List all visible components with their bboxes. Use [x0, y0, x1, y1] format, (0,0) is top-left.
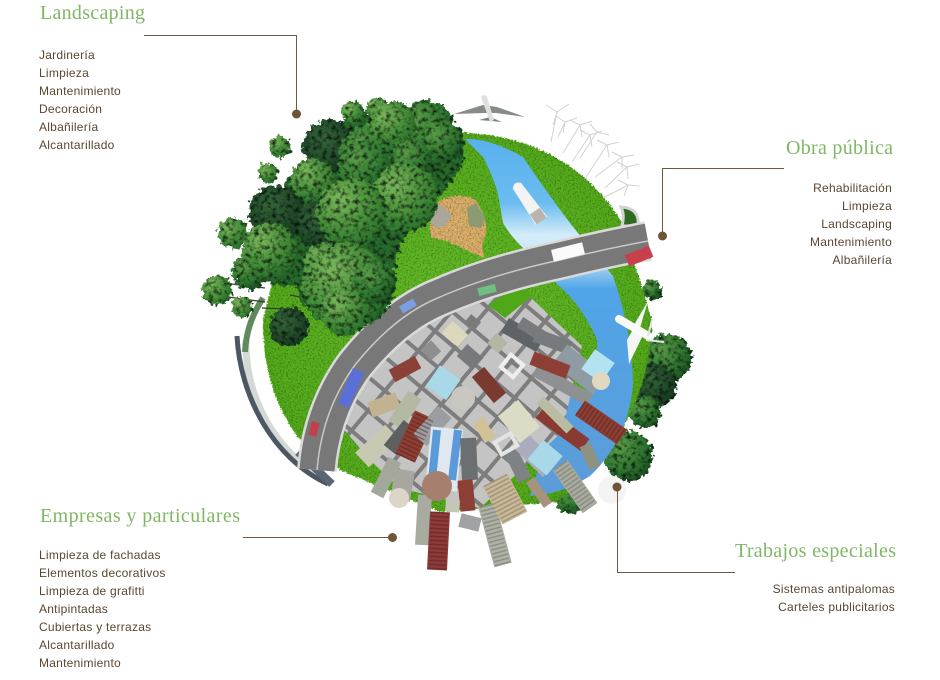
grass sphere	[263, 132, 652, 512]
list: Landscaping services: Decoración	[39, 102, 102, 116]
road curl	[621, 207, 638, 226]
list: Obra pública services	[810, 181, 892, 267]
list: Trabajos especiales services	[773, 582, 895, 614]
list: Landscaping services: Limpieza	[39, 66, 89, 80]
list: Empresas y particulares services: Limpieza de fachadas	[39, 548, 161, 562]
list: Empresas y particulares services: Limpieza de grafitti	[39, 584, 145, 598]
right side trees	[554, 280, 692, 514]
green wedge between road and city	[488, 282, 532, 318]
list: Landscaping services: Albañilería	[39, 120, 99, 134]
list: Obra pública services: Landscaping	[821, 217, 892, 231]
list: Landscaping services: Mantenimiento	[39, 84, 121, 98]
connector: Empresas y particulares	[243, 533, 397, 542]
houses	[427, 203, 485, 228]
list: Landscaping services: Alcantarillado	[39, 138, 115, 152]
list: Empresas y particulares services: Mantenimiento	[39, 656, 121, 670]
trees: bright canopy	[202, 97, 464, 336]
airplane: top	[454, 95, 525, 122]
list: Obra pública services: Rehabilitación	[813, 181, 892, 195]
illustration: miniature planet	[202, 95, 692, 570]
list: Empresas y particulares services	[39, 548, 166, 670]
list: Obra pública services: Limpieza	[842, 199, 892, 213]
list: Empresas y particulares services: Elementos decorativos	[39, 566, 166, 580]
wind turbines	[546, 104, 640, 198]
heading: Trabajos especiales: Trabajos especiales	[735, 540, 896, 562]
elevated rail ring	[237, 298, 332, 484]
airplane: right	[619, 301, 664, 364]
sand clearing	[430, 196, 486, 258]
list: Landscaping services	[39, 48, 121, 152]
list: Obra pública services: Mantenimiento	[810, 235, 892, 249]
road	[317, 241, 648, 470]
list: Empresas y particulares services: Cubiertas y terrazas	[39, 620, 151, 634]
heading: Obra pública: Obra pública	[786, 137, 893, 159]
connector: Trabajos especiales	[598, 476, 735, 572]
list: Trabajos especiales services: Carteles publicitarios	[778, 600, 895, 614]
list: Empresas y particulares services: Antipintadas	[39, 602, 108, 616]
list: Empresas y particulares services: Alcantarillado	[39, 638, 115, 652]
connector: Obra pública	[658, 168, 784, 240]
connector: Landscaping	[144, 36, 301, 118]
list: Landscaping services: Jardinería	[39, 48, 95, 62]
window hatching	[405, 408, 622, 570]
ship	[510, 179, 547, 225]
trees: dark background canopy	[232, 100, 455, 347]
heading: Landscaping: Landscaping	[40, 2, 145, 24]
city ground	[340, 280, 582, 508]
list: Trabajos especiales services: Sistemas antipalomas	[773, 582, 895, 596]
list: Obra pública services: Albañilería	[833, 253, 892, 267]
tree trunks	[215, 282, 310, 309]
heading: Empresas y particulares: Empresas y particulares	[40, 505, 240, 527]
rooftops and domes	[389, 349, 615, 508]
skyscrapers	[362, 318, 622, 570]
vehicles	[308, 242, 653, 437]
trees: canopy base	[247, 108, 464, 330]
river	[465, 139, 633, 496]
